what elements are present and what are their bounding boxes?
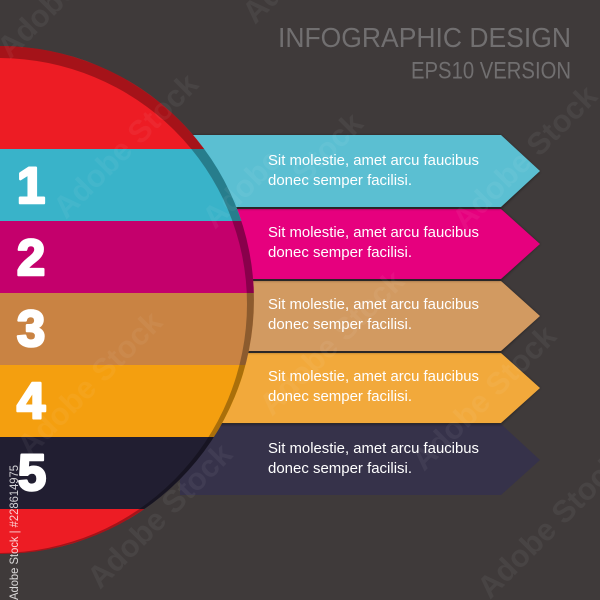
- arrow 5: navy: donec semper facilisi.: [268, 461, 412, 477]
- title: INFOGRAPHIC DESIGN: [278, 22, 571, 53]
- arrow banners: [180, 135, 540, 495]
- watermark: Adobe Stock: [404, 318, 563, 477]
- arrow 4: orange: donec semper facilisi.: [268, 389, 412, 405]
- arrow 2: magenta: donec semper facilisi.: [268, 245, 412, 261]
- watermark: Adobe Stock: [252, 263, 411, 422]
- arrow 1: teal: [180, 135, 540, 209]
- arrow 1: teal: Sit molestie, amet arcu faucibus: [268, 153, 479, 169]
- watermark: Adobe: [195, 142, 288, 235]
- arrow 4: orange: Sit molestie, amet arcu faucibus: [268, 369, 479, 385]
- arrow 2: magenta: Sit molestie, amet arcu faucibus: [268, 225, 479, 241]
- vertical stock id: Adobe Stock | #228614975: [7, 465, 21, 600]
- number 4: 4: [17, 372, 46, 429]
- arrow 3: tan: donec semper facilisi.: [268, 317, 412, 333]
- circle with colour bands: [0, 40, 260, 559]
- number 3: 3: [17, 300, 45, 357]
- arrow 5: navy: Sit molestie, amet arcu faucibus: [268, 441, 479, 457]
- arrow 5: navy: [180, 424, 540, 495]
- circle dark rim: [0, 46, 254, 554]
- watermark: Adobe Stock: [46, 66, 205, 225]
- watermark: Stock: [285, 105, 370, 190]
- watermark: Adobe Stock: [80, 436, 239, 595]
- numbers: [17, 157, 46, 501]
- subtitle: EPS10 VERSION: [411, 58, 571, 84]
- title: [278, 22, 571, 84]
- watermark: Adobe Stock: [445, 78, 600, 237]
- arrow 4: orange: [180, 353, 540, 425]
- number 5: 5: [18, 444, 46, 501]
- number 2: 2: [17, 229, 45, 286]
- arrow 3: tan: [180, 281, 540, 353]
- arrow 2: magenta: [180, 209, 540, 281]
- arrow 3: tan: Sit molestie, amet arcu faucibus: [268, 297, 479, 313]
- watermark: Adobe Stock: [10, 304, 169, 463]
- number 1: 1: [17, 157, 45, 214]
- arrow 1: teal: donec semper facilisi.: [268, 173, 412, 189]
